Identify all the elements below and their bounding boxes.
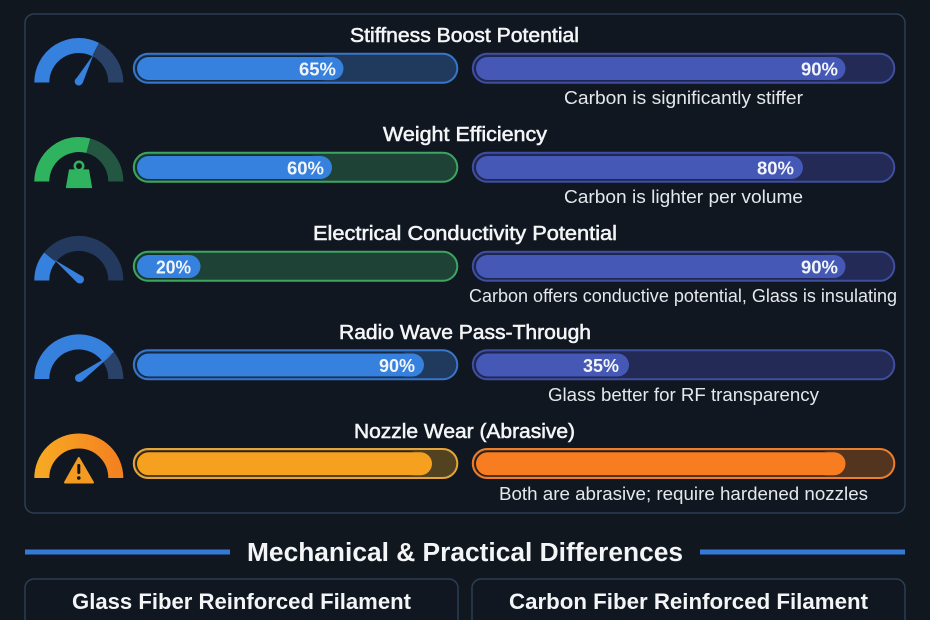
note: nozzle wear: Both are abrasive; require hardened nozzles [499,483,868,504]
bar: glass 60%: 60% [287,158,324,178]
note: weight: Carbon is lighter per volume [564,186,803,207]
bar: carbon 35%: 35% [583,356,619,376]
note: stiffness: Carbon is significantly stiffer [564,87,803,108]
heading: weight: Weight Efficiency [383,124,547,146]
icon: low gauge 20% [42,243,116,284]
bar: glass 65% [134,54,457,83]
panel: performance metrics [25,14,905,513]
heading: stiffness: Stiffness Boost Potential [350,25,579,47]
bar: carbon 90%: 90% [801,257,838,277]
heading: conductivity: Electrical Conductivity Potential [313,223,617,245]
bar: glass abrasive [134,449,457,478]
row: nozzle wear [42,421,894,504]
heading: radio wave: Radio Wave Pass-Through [339,322,591,344]
bar: carbon 90% [473,252,894,281]
icon: blue speed gauge 65% [42,45,116,86]
note: conductivity: Carbon offers conductive potential, Glass is insulating [469,285,897,306]
row: electrical conductivity [42,223,897,306]
icon: amber gauge with warning [42,441,116,482]
bar: glass 20% [134,252,457,281]
bar: carbon 90%: 90% [801,59,838,79]
icon: green gauge with weight [42,145,116,188]
row: stiffness boost potential [42,25,894,108]
row: radio wave pass-through [42,322,894,405]
bar: carbon abrasive [473,449,894,478]
icon: high gauge 90% [42,342,116,382]
row: weight efficiency [42,124,894,207]
bar: glass 20%: 20% [156,257,191,277]
bar: carbon 80% [473,153,894,182]
panel: carbon fiber reinforced filament: Carbon Fiber Reinforced Filament [509,589,869,614]
bar: glass 60% [134,153,457,182]
panel: glass fiber reinforced filament: Glass Fiber Reinforced Filament [72,589,412,614]
bar: carbon 35% [473,350,894,379]
section heading: mechanical and practical differences [25,539,905,567]
bar: glass 90% [134,350,457,379]
bar: glass 90%: 90% [379,356,415,376]
bar: carbon 90% [473,54,894,83]
note: radio wave: Glass better for RF transparency [548,384,820,405]
panel: glass fiber reinforced filament [25,579,458,620]
panel: carbon fiber reinforced filament [472,579,905,620]
section heading: mechanical and practical differences: Mechanical & Practical Differences [247,539,683,567]
bar: glass 65%: 65% [299,59,336,79]
heading: nozzle wear: Nozzle Wear (Abrasive) [354,421,575,443]
bar: carbon 80%: 80% [757,158,794,178]
